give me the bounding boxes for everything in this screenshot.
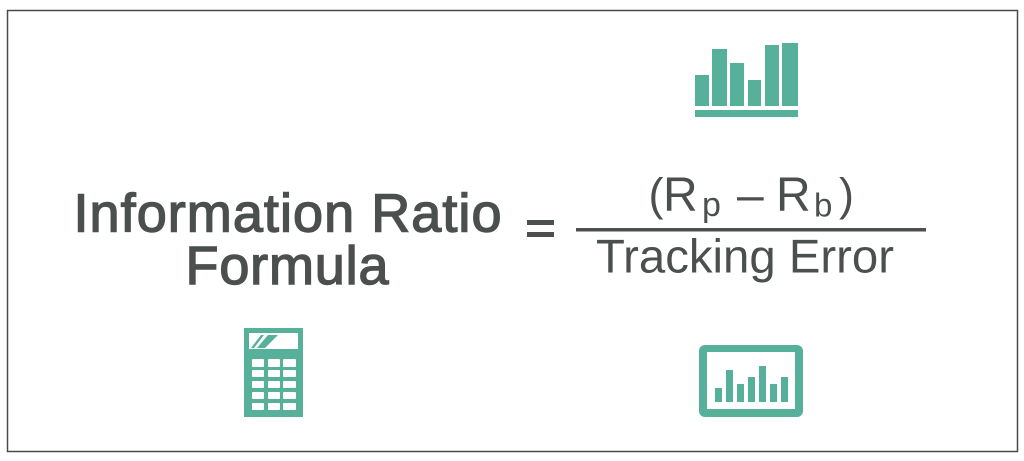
equals sign — [527, 220, 554, 237]
fraction bar — [576, 228, 926, 232]
title: Information Ratio Formula — [74, 184, 502, 296]
formula numerator: R — [776, 169, 811, 222]
formula numerator: b — [814, 186, 832, 224]
icon: calculator — [244, 328, 303, 417]
formula numerator: – — [737, 169, 764, 222]
formula numerator: R — [663, 169, 698, 222]
title: Information Ratio Formula: Formula — [186, 236, 389, 296]
formula denominator: Tracking Error: Tracking Error — [596, 230, 894, 282]
icon: monitor with bar chart — [699, 345, 803, 417]
formula numerator: ) — [839, 169, 854, 220]
title: Information Ratio Formula: Information Ratio — [74, 184, 502, 244]
formula numerator: ( — [648, 169, 664, 220]
formula numerator: p — [702, 186, 721, 224]
icon: bar chart — [695, 43, 798, 117]
formula numerator — [648, 169, 854, 224]
